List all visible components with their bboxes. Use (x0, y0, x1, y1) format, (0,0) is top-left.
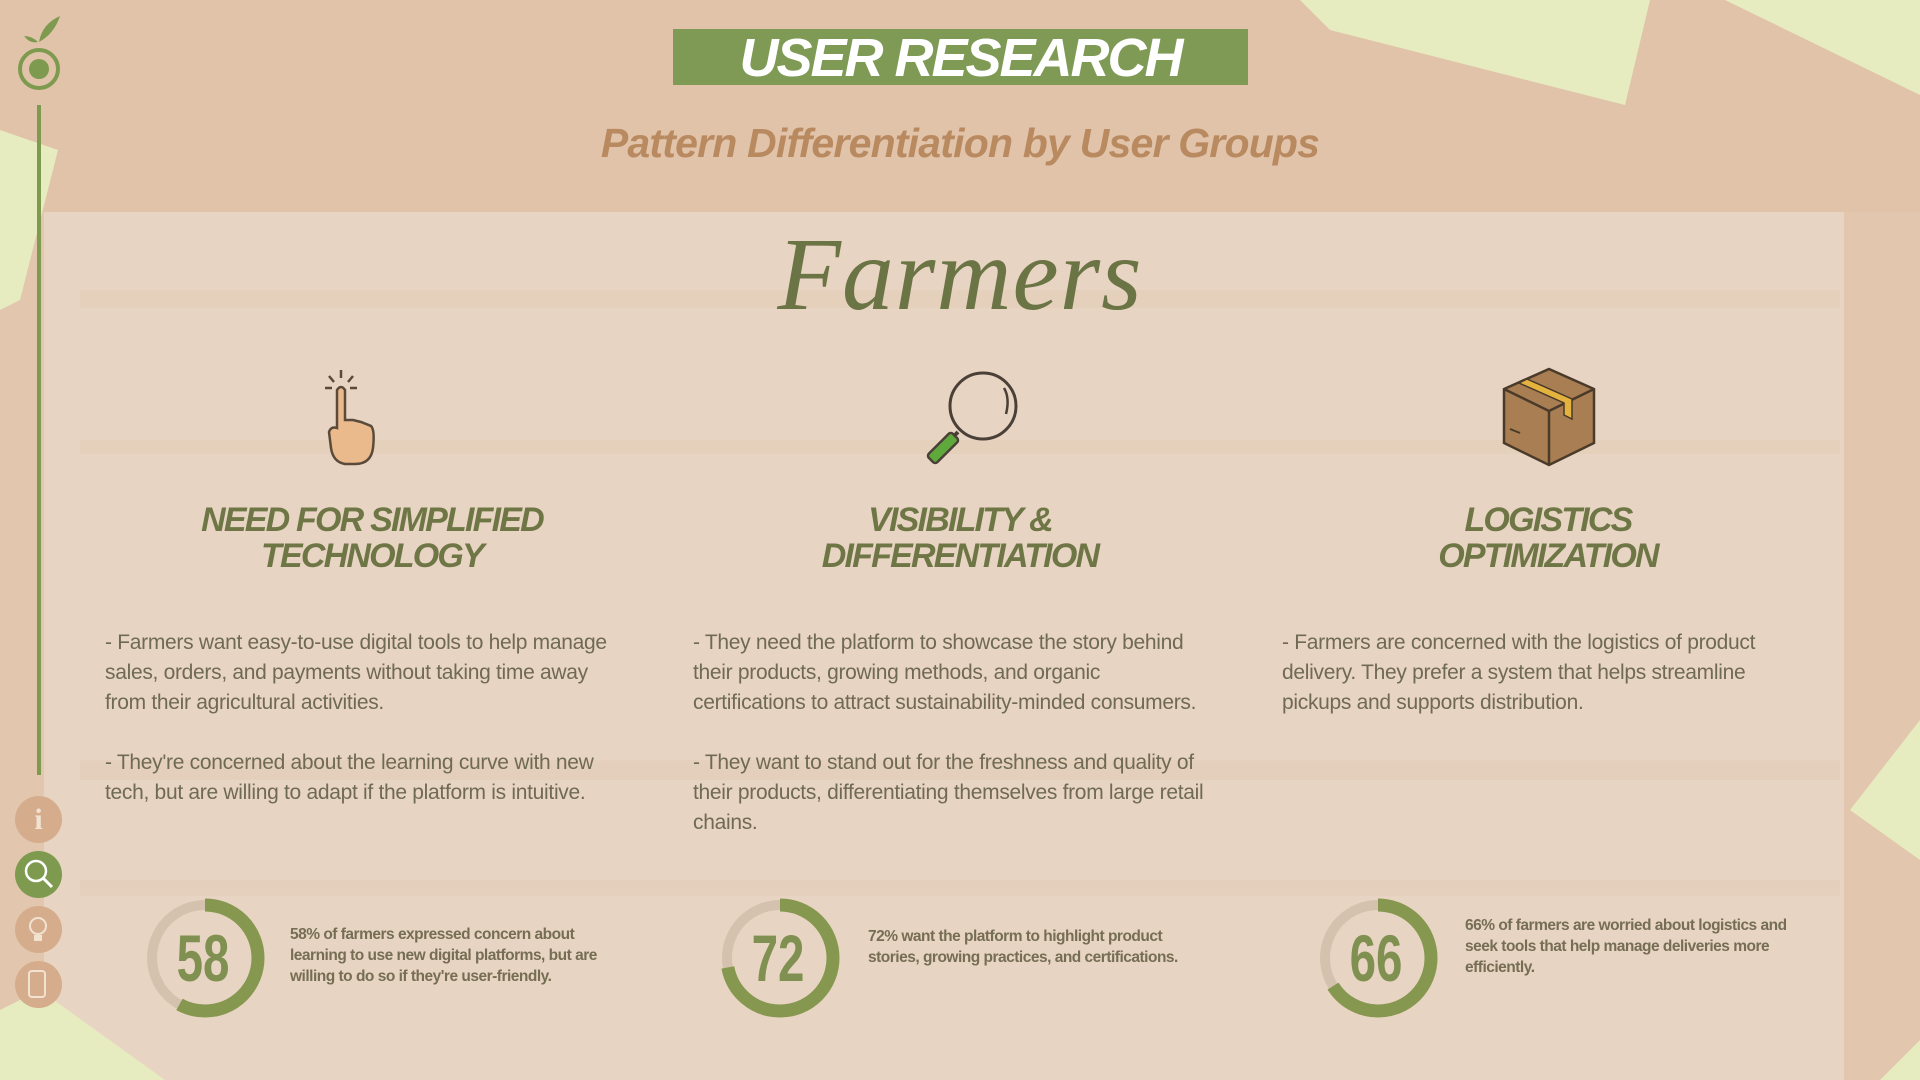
stat text 58: 58% of farmers expressed concern about learning to use new digital platforms, but are willing to do so if they're user-friendly. (290, 926, 597, 985)
panel heading: simplified technology: TECHNOLOGY (261, 537, 483, 575)
donut chart: 58 (147, 898, 264, 1018)
title: USER RESEARCH (739, 28, 1182, 88)
icon: bulb (15, 906, 62, 953)
donut chart: 66 (1320, 898, 1438, 1018)
donut chart: 66: 66 (1350, 922, 1402, 996)
panel heading: logistics (1438, 501, 1660, 575)
body text: col 2: - They need the platform to showcase the story behind their products, growing methods, and organic certifications to attract sustainability-minded consumers. (693, 631, 1196, 714)
body text: col 1: - They're concerned about the learning curve with new tech, but are willing to adapt if the platform is intuitive. (105, 751, 594, 804)
donut chart: 72: 72 (752, 922, 804, 996)
panel heading: simplified technology (201, 501, 544, 575)
icon: info (15, 796, 62, 843)
panel heading: logistics: OPTIMIZATION (1438, 537, 1658, 575)
heading: Farmers: Farmers (777, 217, 1143, 332)
donut chart: 72 (722, 898, 840, 1018)
body text: col 2: - They want to stand out for the freshness and quality of their products, differentiating themselves from large retail chains. (693, 751, 1203, 834)
subtitle: Pattern Differentiation by User Groups (601, 120, 1319, 166)
icon: box (1502, 368, 1596, 466)
panel heading: simplified technology: NEED FOR SIMPLIFIED (201, 501, 543, 539)
icon: search active (15, 851, 62, 898)
icon: touch (15, 961, 62, 1008)
icon: info: i (34, 803, 43, 836)
panel heading: logistics: LOGISTICS (1464, 501, 1632, 539)
body text: col 3: - Farmers are concerned with the logistics of product delivery. They prefer a system that helps streamline pickups and supports distribution. (1282, 631, 1755, 714)
icon: pointing hand (325, 370, 375, 466)
icon: magnifier (926, 372, 1018, 464)
panel heading: visibility: VISIBILITY & (868, 501, 1052, 539)
body text: col 1 (105, 631, 607, 804)
sidebar line (37, 105, 41, 775)
body text: col 2 (693, 631, 1203, 834)
stat text 66: 66% of farmers are worried about logistics and seek tools that help manage deliveries more efficiently. (1465, 917, 1787, 976)
body text: col 1: - Farmers want easy-to-use digital tools to help manage sales, orders, and payments without taking time away from their agricultural activities. (105, 631, 607, 714)
panel heading: visibility (822, 501, 1101, 575)
sidebar nav icons (15, 796, 62, 1008)
sidebar logo (18, 16, 60, 90)
panel heading: visibility: DIFFERENTIATION (822, 537, 1098, 575)
donut chart: 58: 58 (177, 922, 229, 996)
stat text 72: 72% want the platform to highlight product stories, growing practices, and certifications. (868, 928, 1178, 966)
